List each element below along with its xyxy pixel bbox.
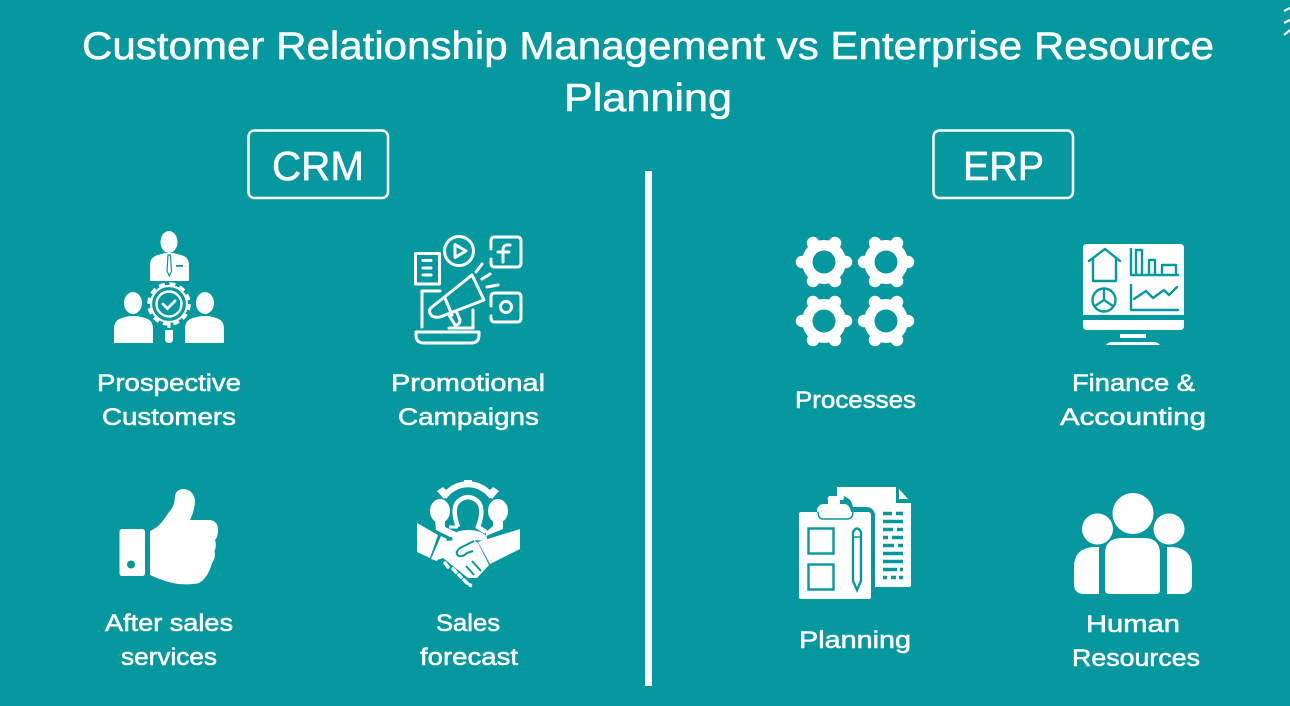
CRM heading: CRM [272,143,364,189]
icon: human resources people [1074,493,1192,594]
label: prospective customers: Customers [102,404,236,431]
icon: promotional campaigns [416,236,521,343]
label: promotional campaigns: Campaigns [398,404,539,431]
ERP heading: ERP [963,143,1044,189]
label: processes: Processes [795,387,916,414]
title: Planning [564,77,732,120]
label: sales forecast: forecast [420,644,518,671]
icon: sales forecast handshake [417,480,520,586]
label: finance and accounting: Accounting [1060,404,1206,431]
label: human resources: Human [1086,611,1180,638]
icon: finance monitor dashboard [1083,244,1184,345]
center divider [645,171,652,686]
label: prospective customers: Prospective [97,370,241,397]
icon: process gears [802,240,908,343]
label: finance and accounting [1060,370,1206,431]
icon: prospective customers [114,231,224,343]
label: planning: Planning [799,627,911,654]
label: after sales services: services [121,644,217,671]
label: human resources: Resources [1072,645,1200,672]
label: human resources [1072,611,1200,672]
title: Customer Relationship Management vs Enterprise Resource [82,25,1214,68]
ERP heading [934,130,1073,198]
title [82,25,1214,120]
label: sales forecast [420,610,518,671]
corner fragment [1284,8,1290,35]
label: sales forecast: Sales [436,610,500,637]
label: finance and accounting: Finance & [1072,370,1195,397]
icon: thumbs up [120,489,218,584]
label: after sales services: After sales [105,610,233,637]
label: promotional campaigns [391,370,545,431]
CRM heading [248,130,388,198]
icon: planning clipboard and document [799,487,911,599]
label: prospective customers [97,370,241,431]
label: after sales services [105,610,233,671]
label: promotional campaigns: Promotional [391,370,545,397]
